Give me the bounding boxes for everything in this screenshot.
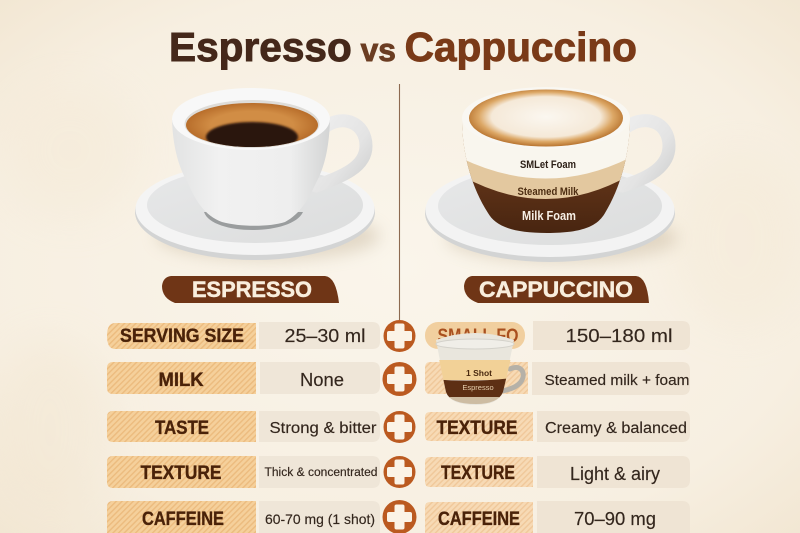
row: texture	[425, 456, 690, 488]
plus icon: serving size	[384, 320, 416, 352]
center divider	[398, 84, 400, 320]
row: caffeine	[425, 501, 690, 533]
coffee	[206, 122, 298, 152]
row: texture: TEXTURE	[441, 463, 515, 484]
row: milk: None	[300, 370, 344, 390]
row: taste	[107, 411, 380, 442]
row: texture: Light & airy	[570, 464, 660, 484]
row: caffeine: CAFFEINE	[438, 509, 520, 530]
row: caffeine: 60-70 mg (1 shot)	[265, 511, 375, 527]
plus icons	[382, 320, 416, 533]
row: taste: Strong & bitter	[270, 420, 376, 437]
title: Espresso vs Cappuccino	[169, 24, 637, 70]
plus icon: milk	[382, 362, 416, 396]
latte foam	[469, 90, 623, 146]
glass body	[436, 333, 514, 405]
handle	[622, 121, 669, 186]
row: serving size: 25–30 ml	[284, 326, 366, 346]
layer label: milk foam: Milk Foam	[522, 209, 576, 223]
glass rim	[436, 339, 514, 349]
plus icon: texture	[384, 456, 416, 488]
row: taste: TEXTURE	[436, 418, 518, 439]
label: 1 shot: 1 Shot	[466, 368, 492, 378]
espresso table	[107, 322, 380, 533]
row: serving size	[425, 321, 690, 350]
layer label: steamed milk: Steamed Milk	[518, 186, 579, 198]
row: serving size: SMALL FO	[438, 326, 518, 347]
row: taste: TASTE	[155, 418, 209, 439]
small glass espresso cup overlay	[430, 333, 523, 406]
espresso cup illustration	[135, 88, 380, 260]
rim	[462, 87, 630, 149]
espresso header ribbon	[162, 276, 339, 303]
row: texture	[107, 456, 380, 488]
plus icon: taste	[384, 411, 416, 443]
row: serving size: 150–180 ml	[566, 326, 672, 346]
saucer	[425, 163, 675, 262]
cappuccino cup illustration	[425, 87, 678, 262]
plus icon: caffeine	[382, 500, 416, 533]
coffee layers	[439, 360, 510, 404]
espresso header ribbon: ESPRESSO	[192, 277, 312, 302]
row: caffeine	[107, 501, 380, 533]
handle	[502, 367, 523, 391]
row: taste: Creamy & balanced	[545, 420, 687, 437]
saucer	[135, 163, 375, 260]
row: serving size	[107, 322, 380, 349]
cup base ring	[204, 212, 303, 230]
row: taste	[425, 411, 690, 442]
cappuccino table	[425, 321, 690, 533]
row: serving size: SERVING SIZE	[120, 326, 244, 347]
cup body	[172, 120, 330, 226]
row: milk	[425, 362, 690, 395]
cup rim	[172, 88, 330, 150]
cappuccino header ribbon: CAPPUCCINO	[479, 277, 633, 302]
saucer shadow	[446, 214, 678, 262]
handle	[316, 121, 366, 186]
saucer shadow	[156, 212, 380, 260]
layer label: foam: SMLet Foam	[520, 159, 576, 171]
row: texture: Thick & concentrated	[264, 467, 378, 479]
label: espresso: Espresso	[462, 383, 494, 392]
row: texture: TEXTURE	[140, 463, 222, 484]
row: milk	[107, 362, 380, 394]
row: caffeine: 70–90 mg	[574, 509, 656, 529]
crema	[186, 103, 318, 147]
cup layers	[462, 121, 630, 233]
row: milk: MILK	[158, 370, 204, 391]
row: caffeine: CAFFEINE	[142, 509, 224, 530]
row: milk: Steamed milk + foam	[544, 373, 690, 389]
